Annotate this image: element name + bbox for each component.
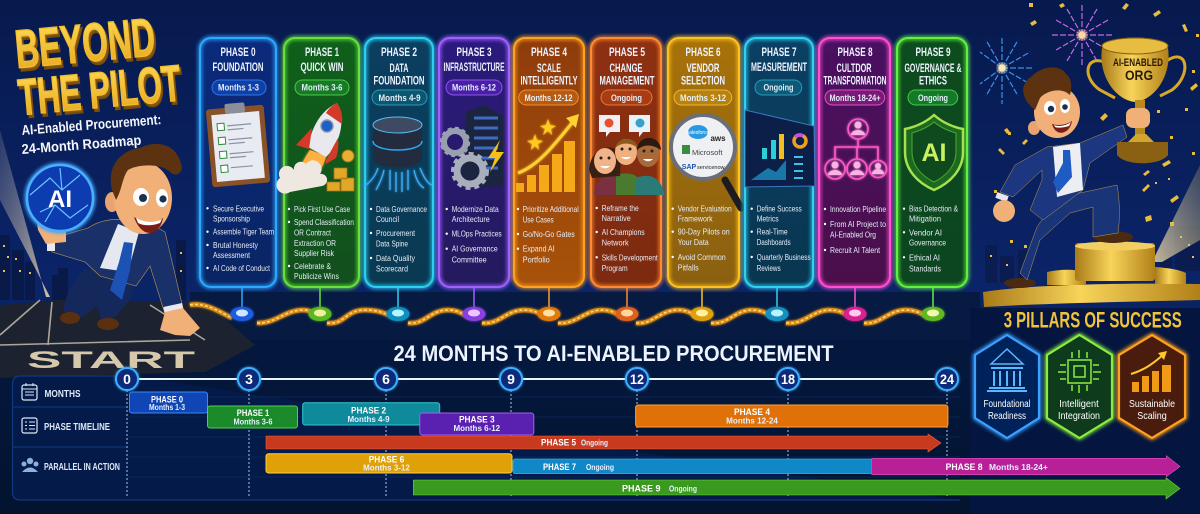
panel: phase 9 governance and ethics: Bias Detection & — [909, 204, 958, 214]
path: winding gold road with node connectors — [190, 304, 927, 323]
panel: phase 3 infrastructure: PHASE 3 — [456, 45, 492, 59]
panel: phase 2 data foundation: DATA — [390, 61, 409, 75]
bar: phase 2 — [303, 403, 440, 425]
panel: phase 7 measurement: Metrics — [757, 213, 779, 223]
bar: phase 0: PHASE 0 — [151, 394, 183, 404]
panel: phase 7 measurement — [745, 38, 815, 287]
panel: phase 8 culture transformation: From AI Project to — [830, 219, 886, 229]
road nodes with connectors — [230, 287, 944, 321]
title: THE PILOT — [16, 54, 183, 126]
panel: phase 5 change management — [589, 38, 664, 287]
panel: phase 8 culture transformation: CULTDOR — [836, 61, 872, 75]
panel: phase 2 data foundation: Procurement — [376, 228, 415, 238]
panel: phase 6 vendor selection: Vendor Evaluation — [678, 204, 732, 214]
bar: phase 6: PHASE 6 — [369, 455, 404, 465]
panel: phase 7 measurement: Define Success — [757, 204, 802, 214]
icon: AI shield — [905, 115, 963, 190]
pillar: foundational readiness: Foundational — [984, 398, 1030, 410]
panel: phase 2 data foundation: FOUNDATION — [374, 74, 424, 88]
panel: phase 7 measurement: PHASE 7 — [762, 45, 797, 59]
panel: phase 9 governance and ethics — [897, 38, 967, 287]
timeline axis with month markers: 12 — [630, 371, 644, 387]
heading: 24 months to AI-enabled procurement: 24 MONTHS TO AI-ENABLED PROCUREMENT — [394, 341, 834, 366]
icon: database with data streams — [364, 117, 432, 192]
panel: phase 2 data foundation: Data Quality — [376, 253, 416, 263]
bar: phase 7: PHASE 7 — [543, 462, 576, 473]
bar: phase 0: Months 1-3 — [149, 403, 185, 412]
icon: server with gears and lightning — [441, 105, 504, 188]
panel: phase 4 scale intelligently: Portfolio — [523, 255, 550, 265]
panel: phase 1 quick win: Pick First Use Case — [294, 204, 350, 214]
panel: phase 3 infrastructure: Committee — [452, 255, 487, 265]
icon: team with speech bubbles — [589, 115, 664, 195]
row label: parallel in action: PARALLEL IN ACTION — [44, 462, 120, 473]
panel: phase 4 scale intelligently: SCALE — [537, 61, 561, 75]
icon: classical building — [987, 349, 1027, 391]
bar: phase 5: PHASE 5 — [541, 438, 577, 448]
panel: phase 9 governance and ethics: Governance — [909, 238, 946, 248]
panel: phase 5 change management: AI Champions — [602, 227, 645, 237]
pillar: foundational readiness: Readiness — [988, 410, 1026, 422]
panel: phase 3 infrastructure: INFRASTRUCTURE — [444, 60, 504, 74]
panel: phase 4 scale intelligently: Expand AI — [523, 244, 555, 254]
pillar: foundational readiness — [975, 335, 1039, 438]
panel: phase 5 change management: CHANGE — [610, 61, 642, 75]
panel: phase 2 data foundation: Council — [376, 214, 399, 224]
bar: phase 4 — [636, 405, 948, 427]
bar: phase 5: Ongoing — [581, 438, 608, 448]
panel: phase 9 governance and ethics: GOVERNANCE & — [904, 61, 962, 75]
panel: phase 2 data foundation — [364, 38, 433, 287]
icon: magnifier over vendor logos: SAP — [682, 164, 697, 171]
bar: phase 7: Ongoing — [586, 463, 614, 472]
panel: phase 7 measurement: Real-Time — [757, 227, 788, 237]
panel: phase 1 quick win — [276, 38, 359, 287]
icon: magnifier over vendor logos: servicenow — [697, 165, 725, 171]
panel: phase 4 scale intelligently: Prioritize Additional — [523, 204, 579, 214]
panel: phase 8 culture transformation: Months 18-24+ — [830, 93, 881, 104]
panel: phase 6 vendor selection: Avoid Common — [678, 252, 726, 262]
timeline axis with month markers: 9 — [507, 371, 515, 387]
panel: phase 2 data foundation: Months 4-9 — [378, 93, 420, 104]
panel: phase 0 foundation: PHASE 0 — [220, 45, 256, 59]
panel: phase 4 scale intelligently: Go/No-Go Gates — [523, 229, 575, 239]
bar: phase 0 — [130, 392, 208, 413]
panel: phase 6 vendor selection: PHASE 6 — [686, 45, 721, 59]
title: THE PILOT — [18, 57, 185, 129]
icon: magnifier over vendor logos — [671, 115, 741, 208]
bar: phase 9: PHASE 9 — [622, 484, 660, 494]
bar: phase 3: Months 6-12 — [453, 424, 501, 433]
panel: phase 4 scale intelligently — [514, 38, 584, 287]
timeline axis with month markers: 6 — [382, 371, 390, 387]
panel: phase 4 scale intelligently: INTELLIGENTLY — [520, 74, 578, 88]
panel: phase 3 infrastructure: AI Governance — [452, 244, 498, 254]
panel: phase 0 foundation: Brutal Honesty — [213, 240, 259, 250]
panel: phase 7 measurement: Reviews — [757, 263, 781, 273]
panel: phase 4 scale intelligently: Months 12-12 — [524, 93, 572, 104]
panel: phase 5 change management: Ongoing — [611, 93, 642, 104]
panel: phase 6 vendor selection — [668, 38, 741, 287]
bar: phase 6 — [266, 454, 512, 473]
confetti and fireworks — [980, 3, 1199, 248]
row label: phase timeline — [22, 418, 110, 433]
panel: phase 9 governance and ethics: Ethical AI — [909, 252, 940, 262]
icon: analytics dashboard — [745, 110, 815, 187]
panel: phase 6 vendor selection: SELECTION — [681, 74, 725, 88]
panel: phase 0 foundation: Months 1-3 — [218, 82, 259, 94]
title: BEYOND — [15, 10, 160, 83]
row label: months — [22, 383, 81, 400]
panel: phase 8 culture transformation: PHASE 8 — [838, 45, 873, 59]
pillar: sustainable scaling: Scaling — [1137, 410, 1167, 422]
pillar: intelligent integration — [1047, 335, 1112, 438]
panel: phase 3 infrastructure: MLOps Practices — [452, 229, 502, 239]
panel: phase 6 vendor selection: Your Data — [678, 237, 709, 247]
panel: phase 5 change management: Program — [602, 263, 628, 273]
subtitle — [21, 111, 162, 157]
panel: phase 4 scale intelligently: Use Cases — [523, 215, 554, 225]
panel: phase 6 vendor selection: Pitfalls — [678, 263, 699, 273]
panel: phase 8 culture transformation: AI-Enabled Org — [830, 230, 876, 240]
panel: phase 5 change management: PHASE 5 — [609, 45, 645, 59]
panel: phase 2 data foundation: Data Spine — [376, 239, 408, 249]
panel: phase 0 foundation: Sponsorship — [213, 213, 250, 223]
bar: phase 1 — [208, 406, 298, 428]
panel: phase 9 governance and ethics: Ongoing — [918, 93, 948, 104]
bar: phase 4: PHASE 4 — [734, 407, 770, 417]
bar: phase 9: Ongoing — [669, 484, 697, 494]
panel: phase 1 quick win: Months 3-6 — [302, 82, 342, 94]
icon: clipboard checklist — [205, 101, 270, 187]
pillar: sustainable scaling — [1119, 335, 1185, 438]
timeline axis with month markers — [116, 368, 958, 497]
bar: phase 2: Months 4-9 — [348, 415, 390, 424]
panel: phase 1 quick win: OR Contract — [294, 228, 331, 238]
bar: phase 5 — [266, 434, 941, 452]
icon: magnifier over vendor logos: Microsoft — [692, 148, 723, 157]
panel: phase 1 quick win: Spend Classification — [294, 217, 354, 227]
start line text: START — [27, 347, 196, 374]
panel: phase 0 foundation: Assemble Tiger Team — [213, 227, 274, 237]
icon: rising bars — [1131, 351, 1171, 392]
icon: gold trophy — [1088, 38, 1185, 163]
panel: phase 0 foundation: Assessment — [213, 250, 250, 260]
panel: phase 9 governance and ethics: Mitigation — [909, 214, 941, 224]
timeline axis with month markers: 24 — [940, 371, 954, 387]
panel: phase 0 foundation — [200, 38, 276, 287]
panel: phase 1 quick win: Publicize Wins — [294, 271, 339, 281]
icon: businessman at start line holding AI brain: AI — [48, 186, 72, 213]
panel: phase 3 infrastructure: Modernize Data — [452, 204, 499, 214]
icon: microchip — [1058, 350, 1101, 393]
panel: phase 4 scale intelligently: PHASE 4 — [531, 45, 567, 59]
pillar: intelligent integration: Intelligent — [1059, 398, 1099, 410]
panel: phase 5 change management: Narrative — [602, 213, 631, 223]
panel: phase 7 measurement: Ongoing — [764, 82, 794, 94]
row label: months: MONTHS — [44, 389, 81, 400]
panel: phase 7 measurement: Quarterly Business — [757, 252, 811, 262]
icon: organisation chart — [825, 119, 886, 179]
panel: phase 8 culture transformation: Recruit AI Talent — [830, 245, 880, 255]
panel: phase 6 vendor selection: Months 3-12 — [680, 93, 726, 104]
panel: phase 8 culture transformation: Innovation Pipeline — [830, 204, 886, 214]
bar: phase 2: PHASE 2 — [351, 405, 386, 415]
panel: phase 9 governance and ethics: PHASE 9 — [916, 45, 951, 59]
icon: magnifier over vendor logos: aws — [710, 134, 726, 143]
panel: phase 9 governance and ethics: Standards — [909, 263, 941, 273]
panel: phase 0 foundation: FOUNDATION — [212, 60, 264, 74]
panel: gantt row frame — [12, 376, 960, 500]
bar: phase 3 — [420, 413, 534, 435]
bar: phase 7 — [513, 459, 872, 474]
panel: phase 5 change management: Skills Development — [602, 252, 658, 262]
row label: phase timeline: PHASE TIMELINE — [44, 422, 110, 433]
panel: phase 1 quick win: Celebrate & — [294, 261, 331, 271]
panel: phase 9 governance and ethics: Vendor AI — [909, 227, 942, 237]
panel: phase 3 infrastructure — [439, 38, 509, 287]
panel: phase 5 change management: Network — [602, 238, 629, 248]
panel: phase 0 foundation: Secure Executive — [213, 203, 264, 213]
panel: phase 1 quick win: Extraction OR — [294, 238, 336, 248]
row label: parallel in action — [22, 458, 120, 473]
icon: rocket with coins — [276, 103, 354, 194]
panel: phase 7 measurement: Dashboards — [757, 237, 791, 247]
icon: businessman at start line holding AI brain — [27, 144, 200, 336]
icon: magnifier over vendor logos: salesforce — [687, 130, 710, 136]
panel: phase 8 culture transformation — [819, 38, 890, 287]
bar: phase 4: Months 12-24 — [726, 417, 778, 426]
panel: phase 6 vendor selection: Framework — [678, 213, 713, 223]
title — [13, 7, 185, 129]
bar: phase 8 — [872, 456, 1180, 477]
subtitle: 24-Month Roadmap — [21, 132, 142, 157]
bar: phase 9 — [413, 478, 1180, 499]
icon: businessman raising trophy on podium — [983, 67, 1200, 307]
panel: phase 0 foundation: AI Code of Conduct — [213, 263, 270, 273]
timeline axis with month markers: 3 — [245, 371, 253, 387]
panel: phase 6 vendor selection: VENDOR — [686, 61, 720, 75]
bar: phase 1: Months 3-6 — [234, 418, 273, 426]
icon: gold trophy: ORG — [1125, 67, 1153, 83]
panel: phase 2 data foundation: Scorecard — [376, 264, 408, 274]
panel: phase 2 data foundation: PHASE 2 — [381, 45, 417, 59]
pillar: intelligent integration: Integration — [1058, 410, 1100, 422]
panel: phase 5 change management: MANAGEMENT — [600, 74, 655, 88]
panel: phase 6 vendor selection: 90-Day Pilots on — [678, 227, 730, 237]
panel: phase 1 quick win: Supplier Risk — [294, 248, 335, 258]
panel: phase 1 quick win: QUICK WIN — [300, 60, 344, 74]
panel: phase 7 measurement: MEASUREMENT — [751, 60, 807, 74]
timeline axis with month markers: 18 — [781, 371, 795, 387]
pillar: sustainable scaling: Sustainable — [1129, 398, 1175, 410]
panel: phase 9 governance and ethics: ETHICS — [919, 74, 947, 88]
panel: phase 2 data foundation: Data Governance — [376, 204, 427, 214]
bar: phase 8: Months 18-24+ — [989, 463, 1048, 472]
title: BEYOND — [13, 7, 158, 80]
panel: phase 3 infrastructure: Architecture — [452, 214, 490, 224]
timeline axis with month markers: 0 — [123, 371, 131, 387]
panel: phase 5 change management: Reframe the — [602, 203, 639, 213]
icon: gold trophy: AI-ENABLED — [1113, 57, 1163, 69]
panel: phase 3 infrastructure: Months 6-12 — [452, 82, 496, 94]
bar: phase 3: PHASE 3 — [459, 414, 495, 424]
icon: growth bars with arrow — [516, 114, 579, 192]
subtitle: AI-Enabled Procurement: — [21, 111, 162, 138]
bar: phase 8: PHASE 8 — [946, 462, 983, 473]
bar: phase 6: Months 3-12 — [363, 464, 410, 473]
bar: phase 1: PHASE 1 — [237, 408, 269, 418]
icon: AI shield: AI — [922, 139, 946, 167]
panel: phase 8 culture transformation: TRANSFORMATION — [824, 74, 886, 88]
panel: phase 1 quick win: PHASE 1 — [305, 45, 339, 59]
